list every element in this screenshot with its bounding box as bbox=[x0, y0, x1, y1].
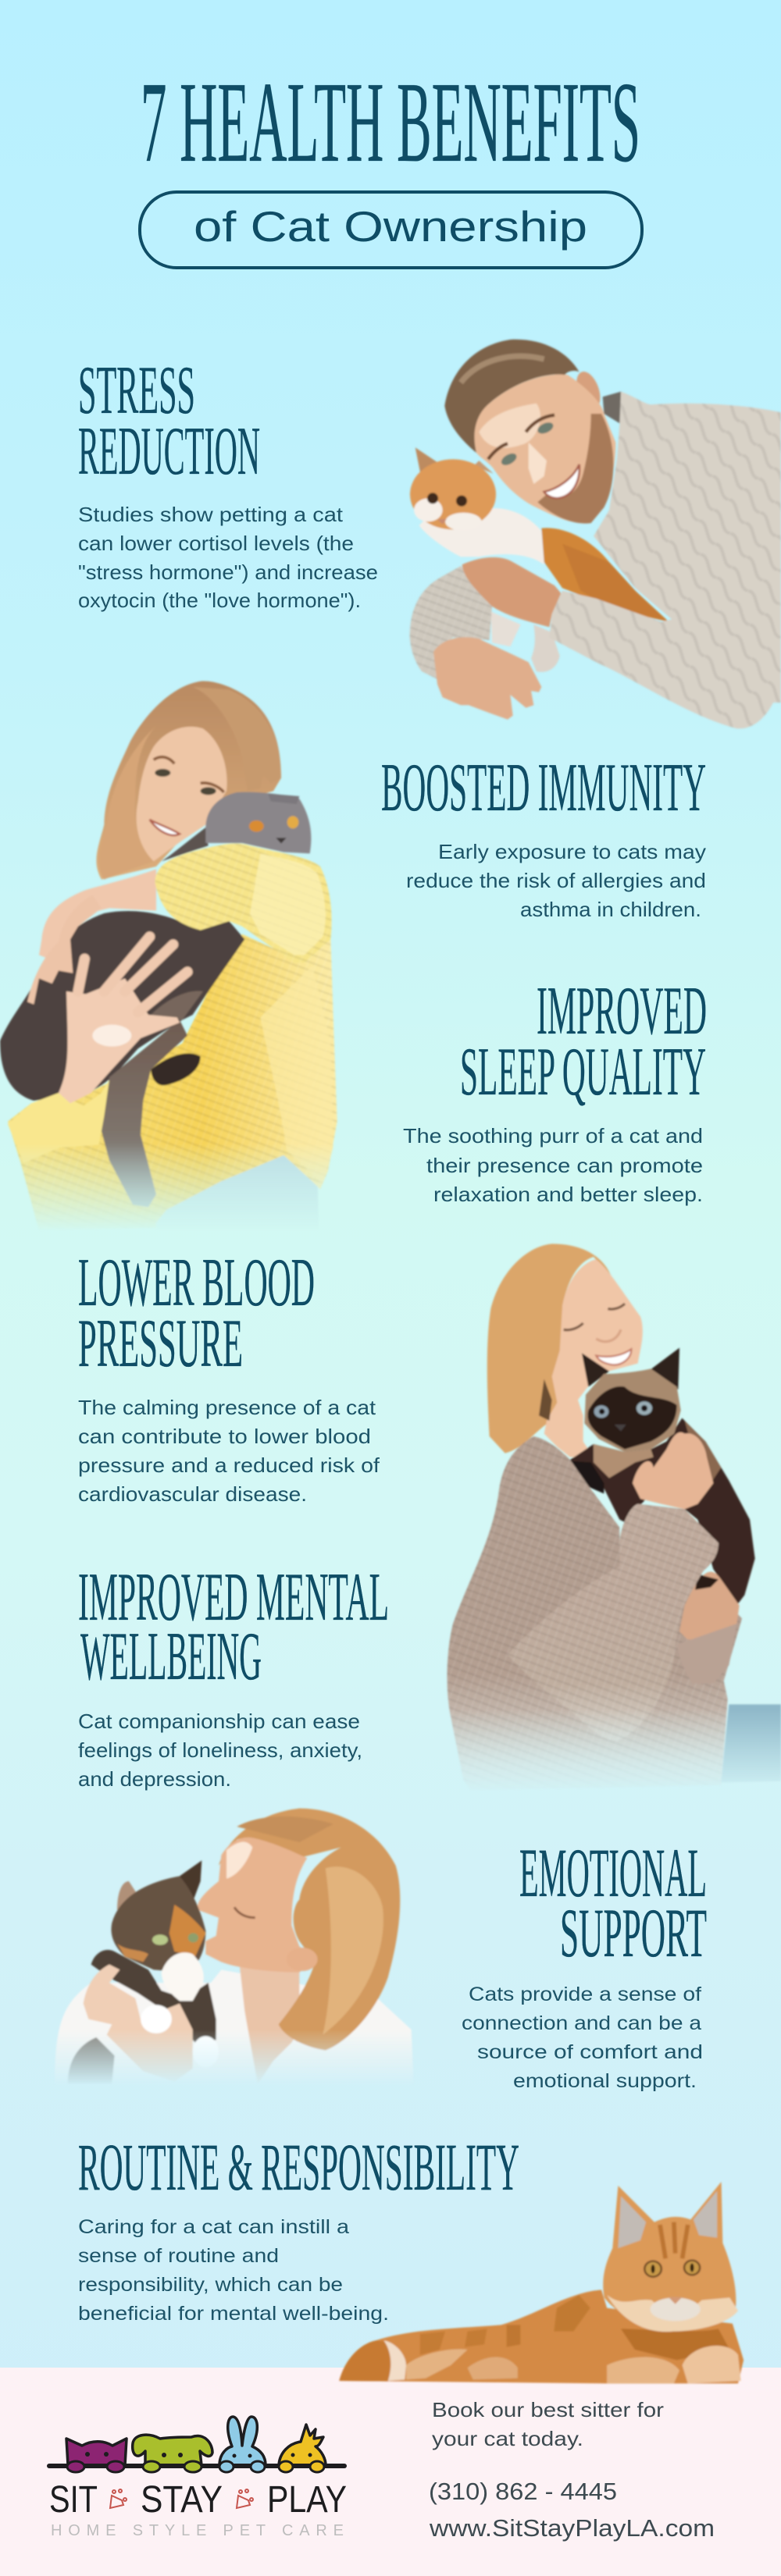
photo: woman in beige sweater with siamese cat bbox=[448, 1244, 781, 1790]
heading: improved mental wellbeing: WELLBEING bbox=[80, 1619, 262, 1695]
text: improved mental wellbeing bbox=[78, 1710, 362, 1791]
contact details bbox=[429, 2478, 715, 2542]
text: improved sleep quality: their presence can promote bbox=[426, 1154, 703, 1177]
icon: blue bunny bbox=[219, 2417, 266, 2465]
text: emotional support bbox=[462, 1984, 703, 2092]
heading: improved mental wellbeing bbox=[78, 1560, 389, 1695]
text: REDUCTION bbox=[78, 414, 260, 489]
icon: green dog bbox=[133, 2435, 212, 2465]
text: boosted immunity bbox=[406, 840, 706, 921]
text: routine and responsibility: responsibility, which can be bbox=[78, 2274, 343, 2296]
text: improved mental wellbeing: and depression. bbox=[78, 1767, 231, 1791]
text: routine and responsibility: beneficial for mental well-being. bbox=[78, 2303, 389, 2325]
heading: emotional support bbox=[519, 1835, 707, 1972]
heading: lower blood pressure bbox=[78, 1245, 315, 1382]
photo: woman in yellow sweater with grey cat bbox=[0, 681, 337, 1231]
logo wordmark: SIT bbox=[49, 2479, 98, 2521]
footer band bbox=[0, 2368, 781, 2576]
text: lower blood pressure: can contribute to lower blood bbox=[78, 1425, 371, 1448]
text: improved sleep quality bbox=[403, 1124, 703, 1206]
text: stress reduction: oxytocin (the "love hormone"). bbox=[78, 589, 361, 612]
contact details: www.SitStayPlayLA.com bbox=[429, 2514, 715, 2542]
photo: woman kissing calico cat bbox=[55, 1809, 414, 2087]
heading: improved sleep quality bbox=[460, 973, 707, 1110]
text: lower blood pressure: The calming presence of a cat bbox=[78, 1396, 376, 1419]
ledge and paws bbox=[47, 2461, 347, 2472]
text: stress reduction: Studies show petting a cat bbox=[78, 503, 344, 526]
logo wordmark bbox=[49, 2479, 347, 2521]
contact details: (310) 862 - 4445 bbox=[429, 2478, 617, 2505]
text: stress reduction: can lower cortisol levels (the bbox=[78, 532, 354, 555]
text: boosted immunity: reduce the risk of allergies and bbox=[406, 869, 706, 892]
heading: stress reduction bbox=[78, 353, 260, 489]
icon: purple cat bbox=[66, 2439, 127, 2465]
call to action text bbox=[432, 2398, 664, 2450]
photo: man hugging orange cat bbox=[410, 340, 781, 728]
text: improved sleep quality: The soothing purr of a cat and bbox=[403, 1124, 703, 1147]
logo wordmark: PLAY bbox=[267, 2479, 347, 2521]
text: lower blood pressure: cardiovascular disease. bbox=[78, 1482, 307, 1506]
icon: paw prints bbox=[110, 2489, 253, 2508]
text: lower blood pressure: pressure and a reduced risk of bbox=[78, 1453, 380, 1477]
text: stress reduction bbox=[78, 503, 378, 612]
text: emotional support: connection and can be a bbox=[462, 2012, 701, 2034]
heading: stress reduction: STRESS bbox=[78, 353, 195, 429]
text: lower blood pressure bbox=[78, 1396, 380, 1506]
photo: orange maine coon cat lying down bbox=[339, 2182, 744, 2383]
text: routine and responsibility bbox=[78, 2216, 389, 2325]
text: boosted immunity: Early exposure to cats may bbox=[438, 840, 706, 863]
heading: lower blood pressure: PRESSURE bbox=[78, 1306, 243, 1382]
text: emotional support: source of comfort and bbox=[477, 2041, 703, 2063]
text: routine and responsibility: Caring for a cat can instill a bbox=[78, 2216, 349, 2238]
text: LOWER BLOOD bbox=[78, 1245, 315, 1321]
call to action text: Book our best sitter for bbox=[432, 2398, 664, 2421]
text: improved mental wellbeing: Cat companionship can ease bbox=[78, 1710, 360, 1733]
text: stress reduction: "stress hormone") and increase bbox=[78, 560, 378, 584]
text: improved sleep quality: relaxation and better sleep. bbox=[433, 1183, 703, 1206]
text: emotional support: emotional support. bbox=[513, 2070, 697, 2092]
logo: sit stay play bbox=[47, 2417, 347, 2539]
subtitle pill: of Cat Ownership bbox=[194, 202, 587, 251]
text: emotional support: Cats provide a sense of bbox=[469, 1984, 701, 2005]
text: IMPROVED MENTAL bbox=[78, 1560, 389, 1635]
subtitle pill bbox=[140, 192, 642, 268]
logo wordmark: STAY bbox=[141, 2479, 223, 2521]
icon: yellow bird bbox=[279, 2425, 326, 2465]
text: routine and responsibility: sense of routine and bbox=[78, 2245, 279, 2267]
text: boosted immunity: asthma in children. bbox=[520, 898, 701, 921]
logo tagline: HOME STYLE PET CARE bbox=[51, 2522, 344, 2539]
call to action text: your cat today. bbox=[432, 2427, 583, 2450]
text: improved mental wellbeing: feelings of loneliness, anxiety, bbox=[78, 1738, 362, 1762]
